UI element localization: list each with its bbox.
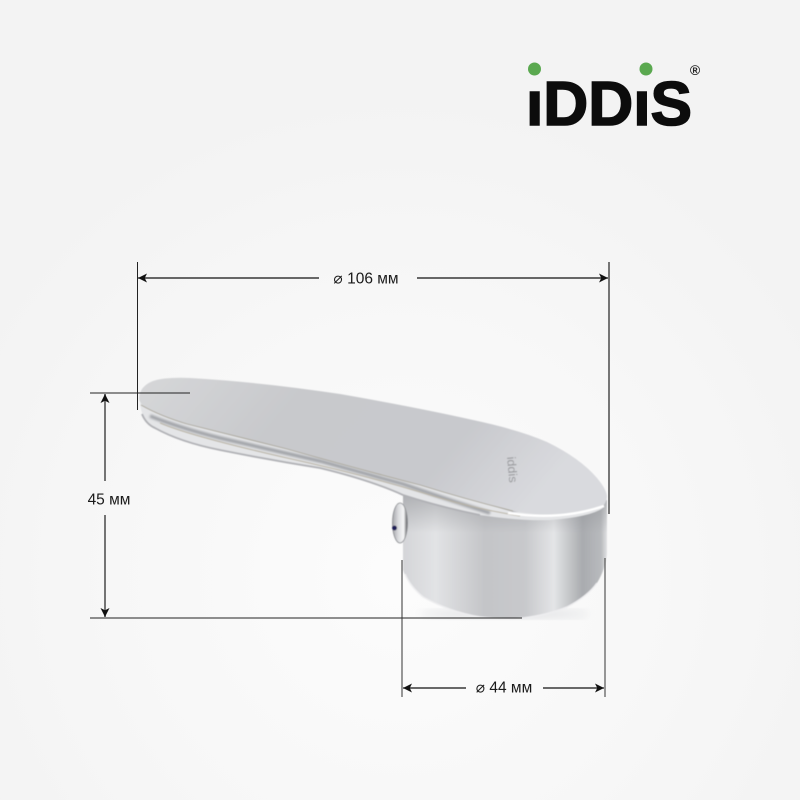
button body — [392, 503, 408, 543]
logo dot: right — [640, 62, 652, 76]
underside grey reflection band — [150, 416, 490, 513]
logo: IDDIS — [526, 62, 701, 139]
lever bevel tan line — [160, 423, 520, 516]
handle shadow — [420, 609, 590, 619]
lever front edge highlight — [508, 506, 604, 516]
logo dot: left — [528, 62, 541, 76]
label: 45 мм: 45 мм — [88, 492, 130, 508]
top surface edge line — [141, 405, 513, 511]
label: 106 mm: ⌀ 106 мм — [333, 270, 399, 288]
logo wordmark: ıDDıS — [526, 70, 692, 139]
lever top surface — [139, 378, 607, 515]
label: 44 mm: ⌀ 44 мм — [476, 678, 532, 696]
cylinder body — [403, 490, 607, 619]
button indicator — [392, 526, 397, 530]
body foot edge — [405, 574, 597, 619]
side button — [392, 503, 408, 543]
lever underside — [140, 403, 603, 520]
product: lever handle — [139, 378, 607, 619]
body top shadow — [403, 490, 607, 597]
engraved brand mark: iddis — [504, 456, 520, 483]
registered mark: ® — [690, 62, 701, 78]
underside lower edge — [142, 414, 480, 515]
